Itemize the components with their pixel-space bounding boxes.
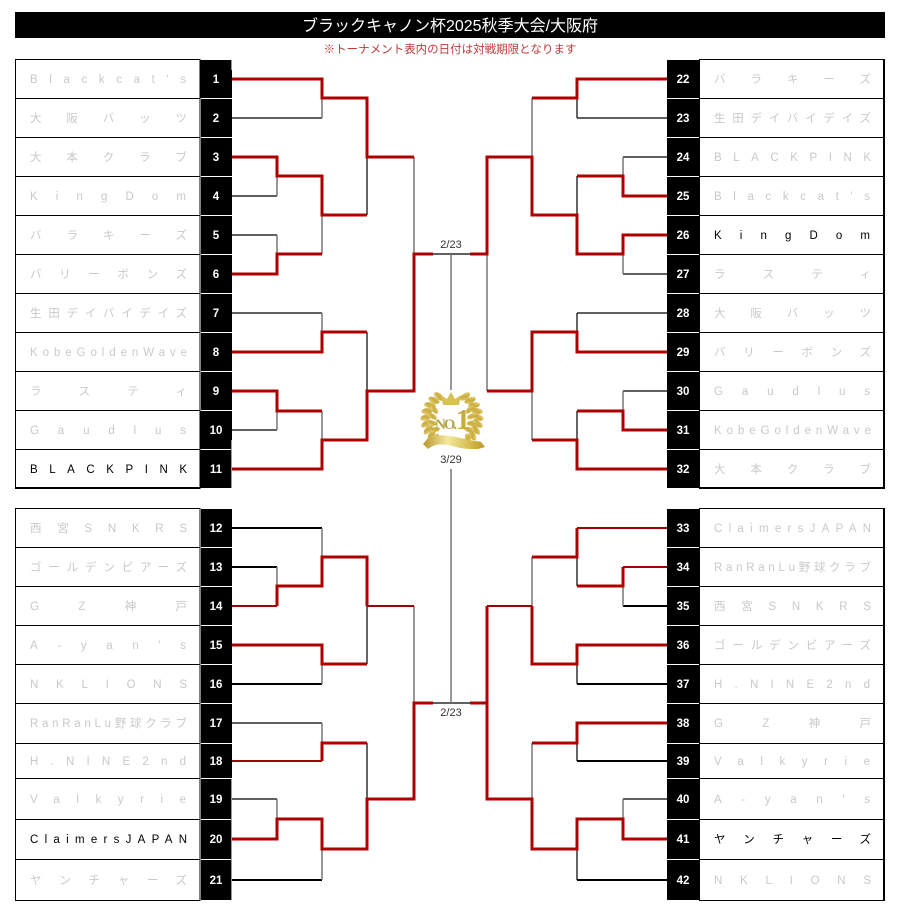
entry 8: 8	[213, 347, 220, 359]
entry 5: バラキーズ	[30, 228, 187, 242]
entry 36	[667, 626, 884, 664]
entry 8	[16, 332, 232, 372]
entry 7	[16, 294, 232, 332]
number column grey edge stripes	[230, 60, 232, 900]
entry 3: 3	[213, 152, 219, 164]
entry 23	[667, 98, 884, 138]
entry 30	[667, 372, 884, 410]
entry 37	[667, 664, 884, 704]
entry 7: 7	[213, 308, 219, 320]
entry 18: 18	[210, 756, 223, 768]
entry 4	[16, 176, 232, 216]
entry 3	[16, 138, 232, 176]
icon: gold No.1 laurel medal: 1	[456, 404, 470, 436]
entry 27: ラスティ	[714, 269, 871, 281]
entry 16	[16, 664, 232, 704]
entry 36: ゴールデンビアーズ	[714, 638, 871, 652]
entry 35: 35	[677, 601, 690, 613]
entry 15: 15	[210, 640, 223, 652]
bracket: upper left	[232, 79, 433, 469]
entry 37: H.NINE2nd	[714, 679, 870, 691]
entry 33	[667, 508, 884, 548]
entry 24: BLACKPINK	[714, 152, 871, 164]
entry 20: ClaimersJAPAN	[30, 834, 187, 846]
entry 24: 24	[677, 152, 690, 164]
icon: gold No.1 laurel medal	[419, 391, 485, 449]
title bar: ブラックキャノン杯2025秋季大会/大阪府	[302, 16, 598, 35]
entry 39	[667, 744, 884, 778]
entry 32	[667, 450, 884, 489]
entry 30: 30	[677, 386, 689, 398]
entry 14: GZ神戸	[30, 599, 187, 613]
entry 23: 生田デイバイデイズ	[714, 111, 871, 125]
entry 31: KobeGoldenWave	[714, 425, 871, 437]
entry 16: NKLIONS	[30, 679, 187, 691]
entry 34: 34	[677, 562, 690, 574]
entry 27	[667, 254, 884, 294]
entry 20: 20	[210, 834, 222, 846]
bracket: lower left	[232, 528, 433, 880]
entry 32: 大本クラブ	[714, 462, 872, 476]
entry 1: 1	[213, 74, 220, 86]
entry 34: RanRanLu野球クラブ	[714, 560, 872, 574]
entry 21	[16, 860, 232, 900]
entry 10	[16, 410, 232, 450]
entry 6: バリーボンズ	[30, 267, 187, 281]
entry 3: 大本クラブ	[30, 150, 188, 164]
entry 18	[16, 744, 232, 778]
entry 28: 28	[677, 308, 690, 320]
panel: upper right entries	[667, 60, 884, 489]
entry 41: 41	[677, 834, 690, 846]
entry 35	[667, 586, 884, 626]
entry 18: H.NINE2nd	[30, 756, 186, 768]
entry 17: RanRanLu野球クラブ	[30, 716, 188, 730]
entry 9	[16, 372, 232, 410]
entry 13	[16, 548, 232, 586]
entry 12: 12	[210, 523, 222, 535]
entry 22: バラキーズ	[714, 72, 871, 86]
entry 28: 大阪バッツ	[714, 306, 871, 320]
entry 23: 23	[677, 113, 689, 125]
entry 42: NKLIONS	[714, 875, 871, 887]
entry 39: Valkyrie	[714, 756, 870, 768]
entry 6	[16, 254, 232, 294]
entry 15: A-yan's	[30, 640, 186, 652]
entry 6: 6	[213, 269, 219, 281]
panel: lower left entries	[16, 508, 232, 900]
entry 31: 31	[677, 425, 690, 437]
entry 8: KobeGoldenWave	[30, 347, 187, 359]
entry 38	[667, 704, 884, 744]
entry 22: 22	[677, 74, 689, 86]
entry 16: 16	[210, 679, 222, 691]
entry 32: 32	[677, 464, 689, 476]
entry 35: 西宮SNKRS	[714, 600, 871, 613]
entry 40: A-yan's	[714, 794, 870, 806]
entry 1	[16, 60, 232, 98]
entry 25: 25	[677, 191, 690, 203]
entry 10: 10	[210, 425, 222, 437]
entry 2: 2	[213, 113, 219, 125]
entry 26: 26	[677, 230, 689, 242]
entry 37: 37	[677, 679, 689, 691]
icon: gold No.1 laurel medal: NO.	[435, 417, 457, 433]
entry 29: 29	[677, 347, 689, 359]
entry 2: 大阪バッツ	[30, 111, 187, 125]
entry 17	[16, 704, 232, 744]
entry 5: 5	[213, 230, 220, 242]
bracket: upper right	[470, 79, 667, 469]
entry 14: 14	[210, 601, 223, 613]
entry 41: ヤンチャーズ	[714, 832, 871, 846]
bracket: lower right	[470, 528, 667, 880]
date: lower semifinal: 2/23	[440, 707, 462, 719]
entry 13: 13	[210, 562, 222, 574]
entry 4: 4	[213, 191, 220, 203]
entry 21: ヤンチャーズ	[30, 873, 187, 887]
entry 12: 西宮SNKRS	[30, 522, 187, 535]
entry 4: KingDom	[30, 191, 186, 203]
entry 20	[16, 820, 232, 860]
entry 25: Blackcat's	[714, 191, 870, 203]
entry 21: 21	[210, 875, 223, 887]
entry 42: 42	[677, 875, 689, 887]
entry 13: ゴールデンビアーズ	[30, 560, 187, 574]
entry 14	[16, 586, 232, 626]
entry 11	[15, 450, 232, 489]
entry 26	[667, 216, 884, 254]
entry 10: Gaudlus	[30, 425, 186, 437]
entry 19: 19	[210, 794, 222, 806]
entry 17: 17	[210, 718, 222, 730]
entry 15	[16, 626, 232, 664]
final bracket: center lines	[433, 254, 470, 703]
right table outer edge	[883, 59, 885, 901]
panel: upper left entries	[15, 60, 232, 489]
entry 34	[667, 548, 884, 586]
entry 5	[16, 216, 232, 254]
entry 19	[16, 778, 232, 820]
entry 22	[667, 60, 884, 98]
entry 12	[16, 508, 232, 548]
entry 38: 38	[677, 718, 690, 730]
entry 40: 40	[677, 794, 689, 806]
entry 42	[667, 860, 884, 900]
entry 38: GZ神戸	[714, 716, 871, 730]
entry 2	[16, 98, 232, 138]
entry 28	[667, 294, 884, 332]
note: dates are match deadlines: ※トーナメント表内の日付は対戦期限となります	[324, 42, 576, 56]
entry 7: 生田デイバイデイズ	[30, 306, 187, 320]
entry 26: KingDom	[714, 230, 870, 242]
entry 39: 39	[677, 756, 689, 768]
entry 41	[667, 820, 884, 860]
entry 31	[667, 410, 884, 450]
entry 9: ラスティ	[30, 386, 187, 398]
entry 1: Blackcat's	[30, 74, 186, 86]
entry 29	[667, 332, 884, 372]
entry 30: Gaudlus	[714, 386, 870, 398]
panel: lower right entries	[667, 508, 884, 900]
entry 40	[667, 778, 884, 820]
entry 27: 27	[677, 269, 689, 281]
entry 33: 33	[677, 523, 689, 535]
date: upper semifinal: 2/23	[440, 239, 462, 251]
entry 9: 9	[213, 386, 219, 398]
entry 33: ClaimersJAPAN	[714, 523, 871, 535]
date: final: 3/29	[440, 454, 462, 466]
entry 25	[667, 176, 884, 216]
entry 11: BLACKPINK	[30, 464, 187, 476]
entry 36: 36	[677, 640, 689, 652]
entry 19: Valkyrie	[30, 794, 186, 806]
entry 11: 11	[210, 464, 223, 476]
entry 29: バリーボンズ	[714, 345, 871, 359]
title bar	[15, 12, 885, 38]
entry 24	[667, 138, 884, 176]
